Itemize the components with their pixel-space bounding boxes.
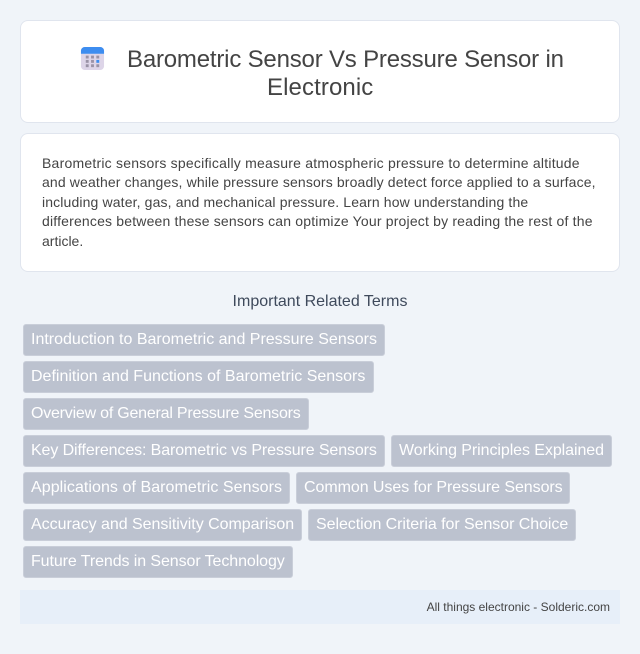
- title: [127, 46, 564, 101]
- title: Electronic: [267, 74, 373, 101]
- footer bar: [20, 590, 620, 624]
- tag: [391, 435, 612, 467]
- tag: [23, 509, 302, 541]
- tag: [23, 546, 293, 578]
- tag: [23, 398, 309, 430]
- tag: Key Differences: Barometric vs Pressure Sensors: [31, 442, 377, 459]
- tag: Common Uses for Pressure Sensors: [304, 479, 563, 496]
- intro paragraph: article.: [42, 233, 83, 249]
- intro paragraph: differences between these sensors can optimize Your project by reading the rest of the: [42, 213, 593, 229]
- panel: introduction text: [20, 133, 620, 272]
- intro paragraph: and weather changes, while pressure sensors broadly detect force applied to a surface,: [42, 174, 596, 190]
- tag: Introduction to Barometric and Pressure Sensors: [31, 331, 377, 348]
- tag: Definition and Functions of Barometric Sensors: [31, 368, 365, 385]
- tag: [296, 472, 570, 504]
- tag: Working Principles Explained: [399, 442, 604, 459]
- panel: title card: [20, 20, 620, 123]
- tag: Overview of General Pressure Sensors: [31, 405, 301, 422]
- tag: [23, 435, 385, 467]
- tag: Accuracy and Sensitivity Comparison: [31, 516, 294, 533]
- title: Barometric Sensor Vs Pressure Sensor in: [127, 46, 564, 73]
- intro paragraph: including water, gas, and mechanical pressure. Learn how understanding the: [42, 194, 528, 210]
- heading: important related terms: Important Related Terms: [233, 293, 407, 310]
- tag: [308, 509, 576, 541]
- tag: Applications of Barometric Sensors: [31, 479, 282, 496]
- tag: Future Trends in Sensor Technology: [31, 553, 285, 570]
- related terms tag list: [23, 324, 612, 578]
- icon: calendar app: [80, 47, 104, 70]
- footer text: All things electronic - Solderic.com: [427, 600, 610, 614]
- intro paragraph: Barometric sensors specifically measure atmospheric pressure to determine altitude: [42, 155, 580, 171]
- tag: Selection Criteria for Sensor Choice: [316, 516, 568, 533]
- tag: [23, 361, 374, 393]
- tag: [23, 472, 290, 504]
- intro paragraph: [42, 155, 596, 249]
- tag: [23, 324, 385, 356]
